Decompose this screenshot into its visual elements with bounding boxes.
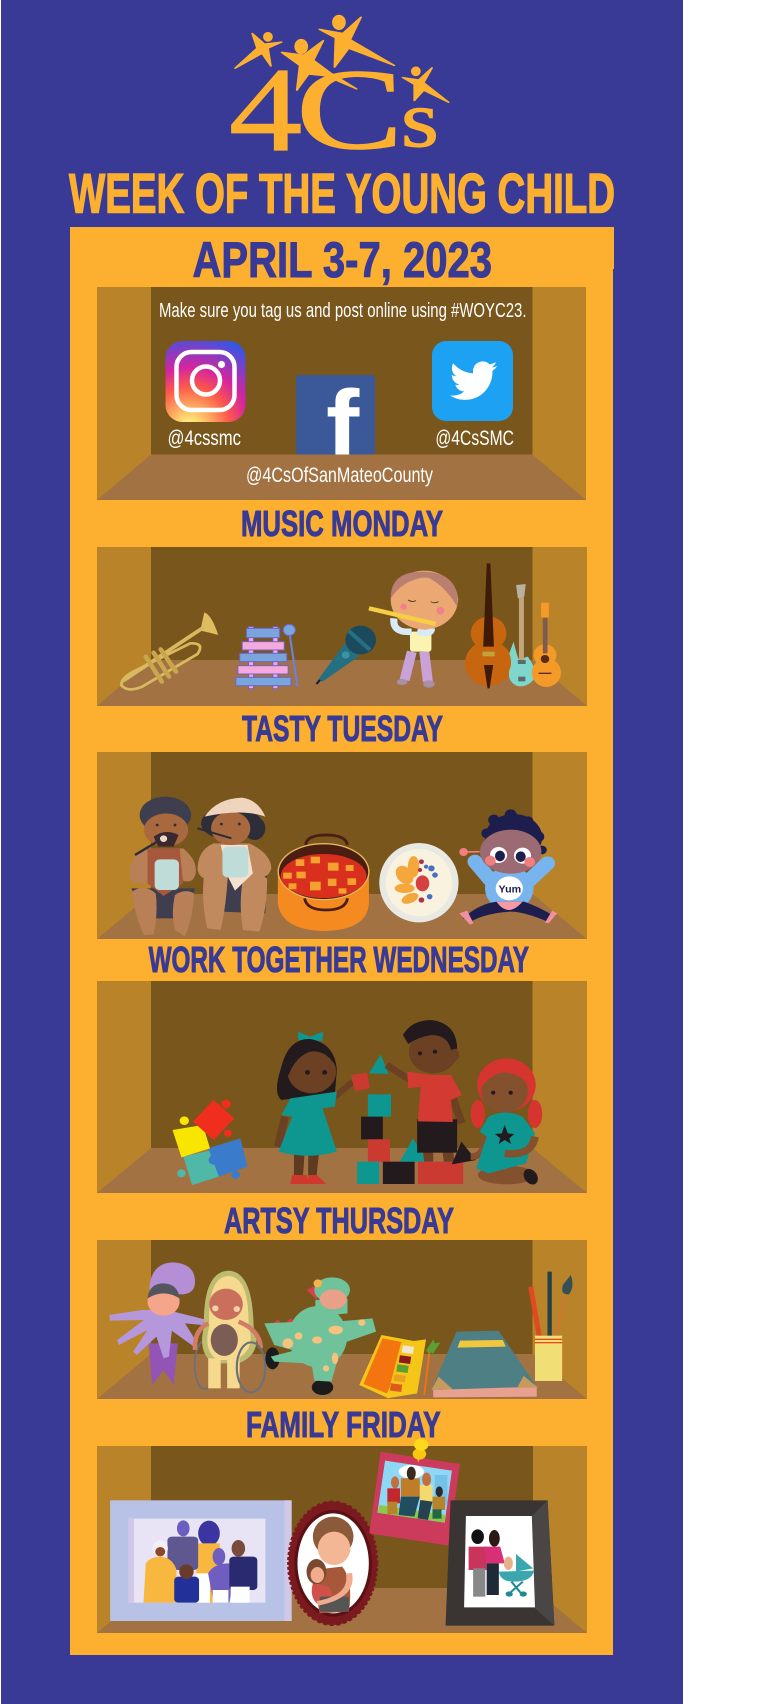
logo wordmark: [229, 43, 439, 176]
heading: tasty tuesday: TASTY TUESDAY: [242, 708, 443, 749]
icon: twitter: [432, 341, 513, 421]
building blocks: [351, 1054, 463, 1184]
heading: artsy thursday: ARTSY THURSDAY: [224, 1200, 454, 1241]
icon: microphone: [316, 626, 376, 684]
logo: 4Cs: [229, 15, 449, 176]
twitter handle: @4CsSMC: [435, 427, 514, 450]
icon: bowl of oatmeal: [379, 843, 459, 922]
child in octopus costume: [109, 1262, 205, 1385]
logo wordmark: s: [401, 74, 439, 164]
icon: instagram: [166, 341, 246, 422]
room: music: [97, 547, 587, 706]
date heading: APRIL 3-7, 2023: [192, 232, 492, 288]
logo wordmark: C: [296, 46, 403, 173]
boy stacking blocks: [387, 1020, 462, 1162]
pinned polaroid: family outdoors: [369, 1452, 460, 1546]
black frame: parents with stroller: [446, 1500, 554, 1626]
icon: trumpet: [121, 612, 218, 689]
child playing flute: [369, 571, 459, 688]
icon: pot of stew: [278, 835, 369, 931]
room: social media: [97, 287, 586, 500]
icon: acoustic guitar: [532, 603, 561, 687]
photo frame: extended family: [110, 1500, 292, 1621]
icon: puzzle pieces: [172, 1100, 247, 1185]
icon: watercolor paint set: [359, 1335, 426, 1398]
icon: facebook: f: [326, 370, 360, 482]
logo figures: [235, 15, 449, 102]
baby with spoon: [459, 809, 557, 925]
icon: pencil cup: [531, 1272, 572, 1381]
child in dinosaur costume: [264, 1277, 376, 1395]
icon: sketchbook: [431, 1331, 538, 1397]
room: art: [97, 1240, 587, 1399]
icon: electric guitar: [509, 584, 536, 686]
icon: double bass: [465, 563, 512, 688]
room: family photos: [97, 1439, 587, 1633]
icon: yellow push pin: [413, 1439, 428, 1462]
icon: facebook: [296, 375, 375, 454]
logo wordmark: 4: [229, 43, 302, 176]
girl with bow: [277, 1032, 353, 1184]
child eating 2: [197, 798, 271, 932]
baby with spoon: Yum: [499, 885, 521, 896]
room: play: [97, 981, 587, 1193]
oval frame: mother and child: [288, 1502, 377, 1625]
icon: xylophone: [236, 624, 297, 689]
heading: music monday: MUSIC MONDAY: [241, 503, 443, 544]
heading: work together wednesday: WORK TOGETHER WEDNESDAY: [149, 939, 529, 980]
instagram handle: @4cssmc: [168, 427, 241, 450]
social prompt text: Make sure you tag us and post online using #WOYC23.: [159, 300, 526, 322]
child eating 1: [129, 797, 196, 937]
icon: paintbrush: [424, 1339, 440, 1395]
child in avocado costume with wheelchair: [195, 1271, 265, 1392]
room: food: [97, 752, 587, 939]
facebook handle: @4CsOfSanMateoCounty: [246, 464, 433, 487]
heading: family friday: FAMILY FRIDAY: [246, 1404, 441, 1445]
orange panel: [70, 227, 614, 1655]
seated girl with star shirt: [452, 1058, 542, 1187]
